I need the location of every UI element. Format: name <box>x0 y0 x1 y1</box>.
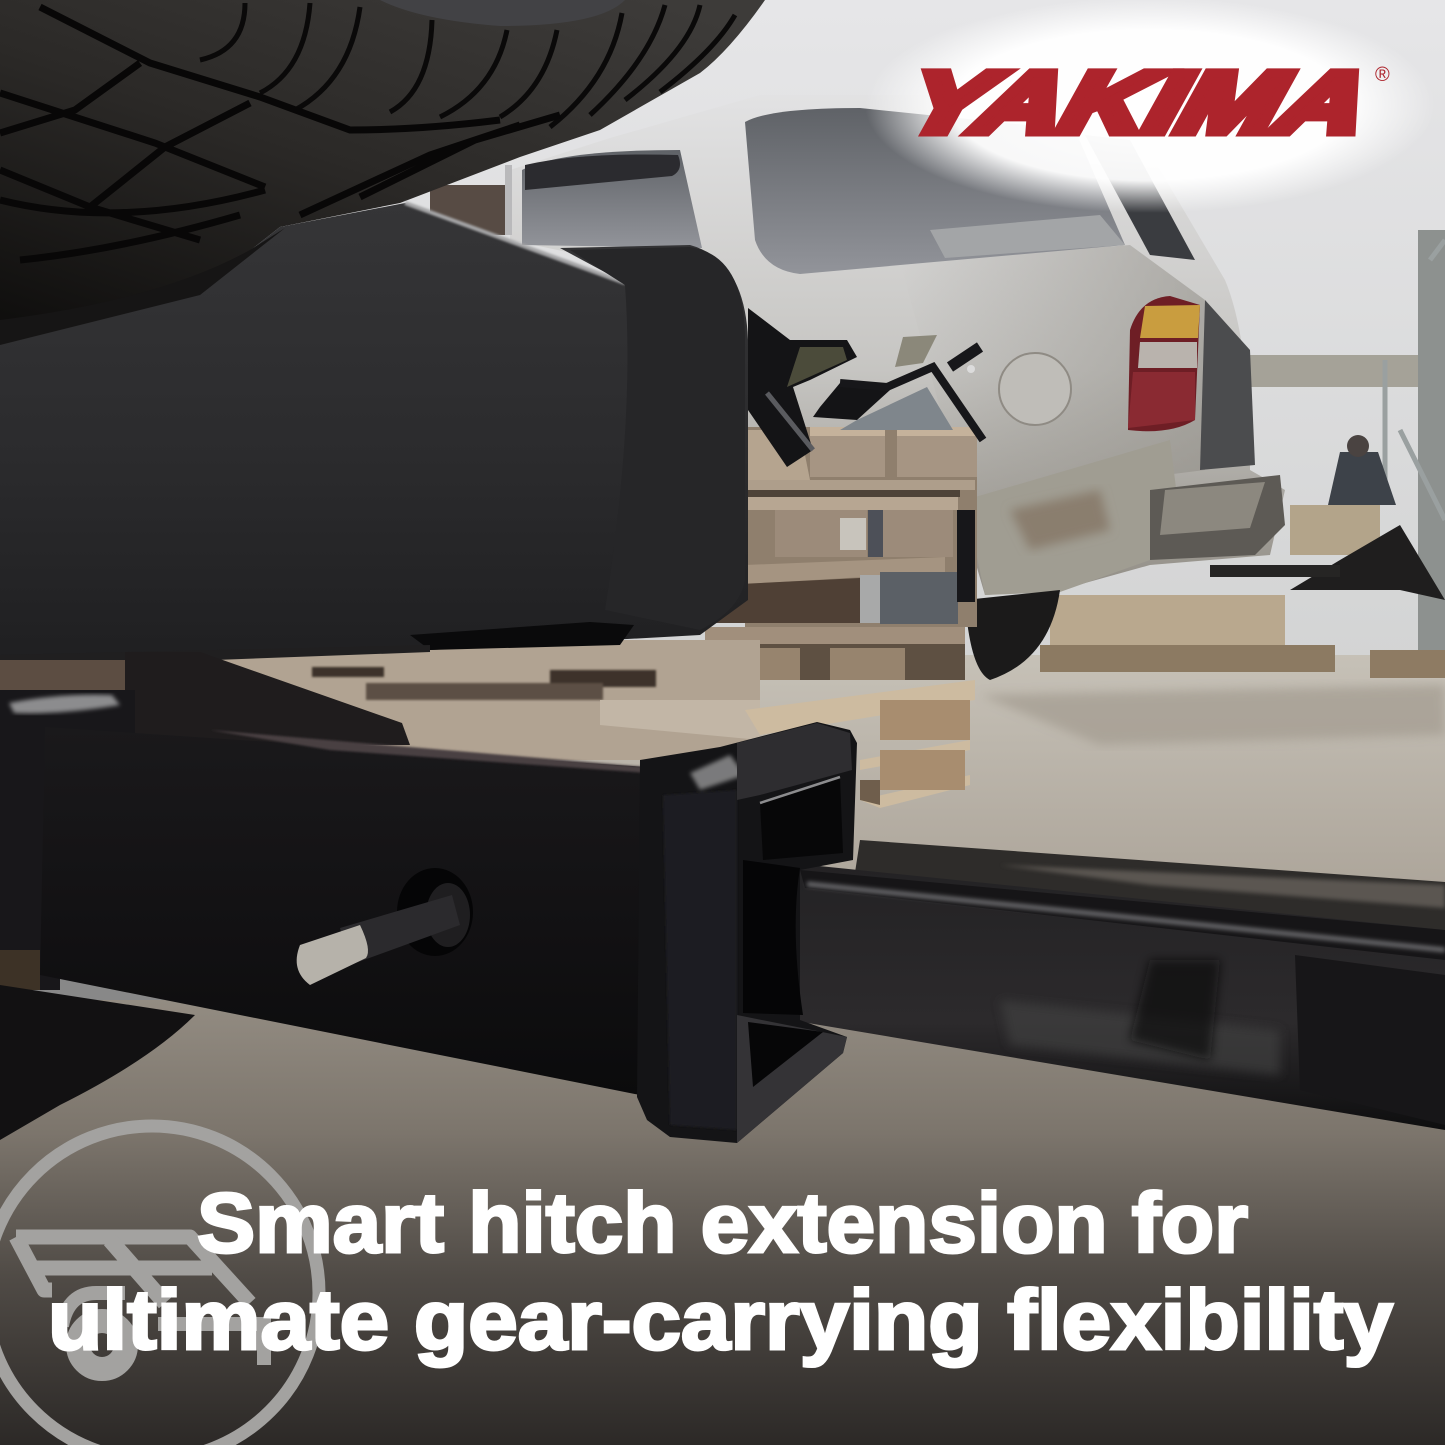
logo: YAKIMA: YAKIMA <box>897 55 1380 151</box>
stacked wooden pallets <box>120 427 977 808</box>
background structures at right <box>1040 230 1445 678</box>
rear tire <box>0 0 765 340</box>
black rear bumper <box>0 203 748 668</box>
icon: hitch rack in circle <box>0 1126 319 1445</box>
hitch pin <box>297 868 473 985</box>
hitch extension bar <box>780 862 1445 1130</box>
white glow behind logo <box>865 0 1435 213</box>
truck hardware behind pallets <box>748 308 983 467</box>
background SUV <box>430 95 1340 680</box>
left tube and wedge under bumper <box>0 652 410 990</box>
headline: ultimate gear-carrying flexibility <box>48 1273 1393 1367</box>
receiver tube <box>40 722 857 1143</box>
logo: YAKIMA: ® <box>1375 64 1390 86</box>
headline: Smart hitch extension for <box>197 1176 1248 1270</box>
headline <box>48 1176 1393 1367</box>
tire shadow lower left <box>0 985 195 1140</box>
